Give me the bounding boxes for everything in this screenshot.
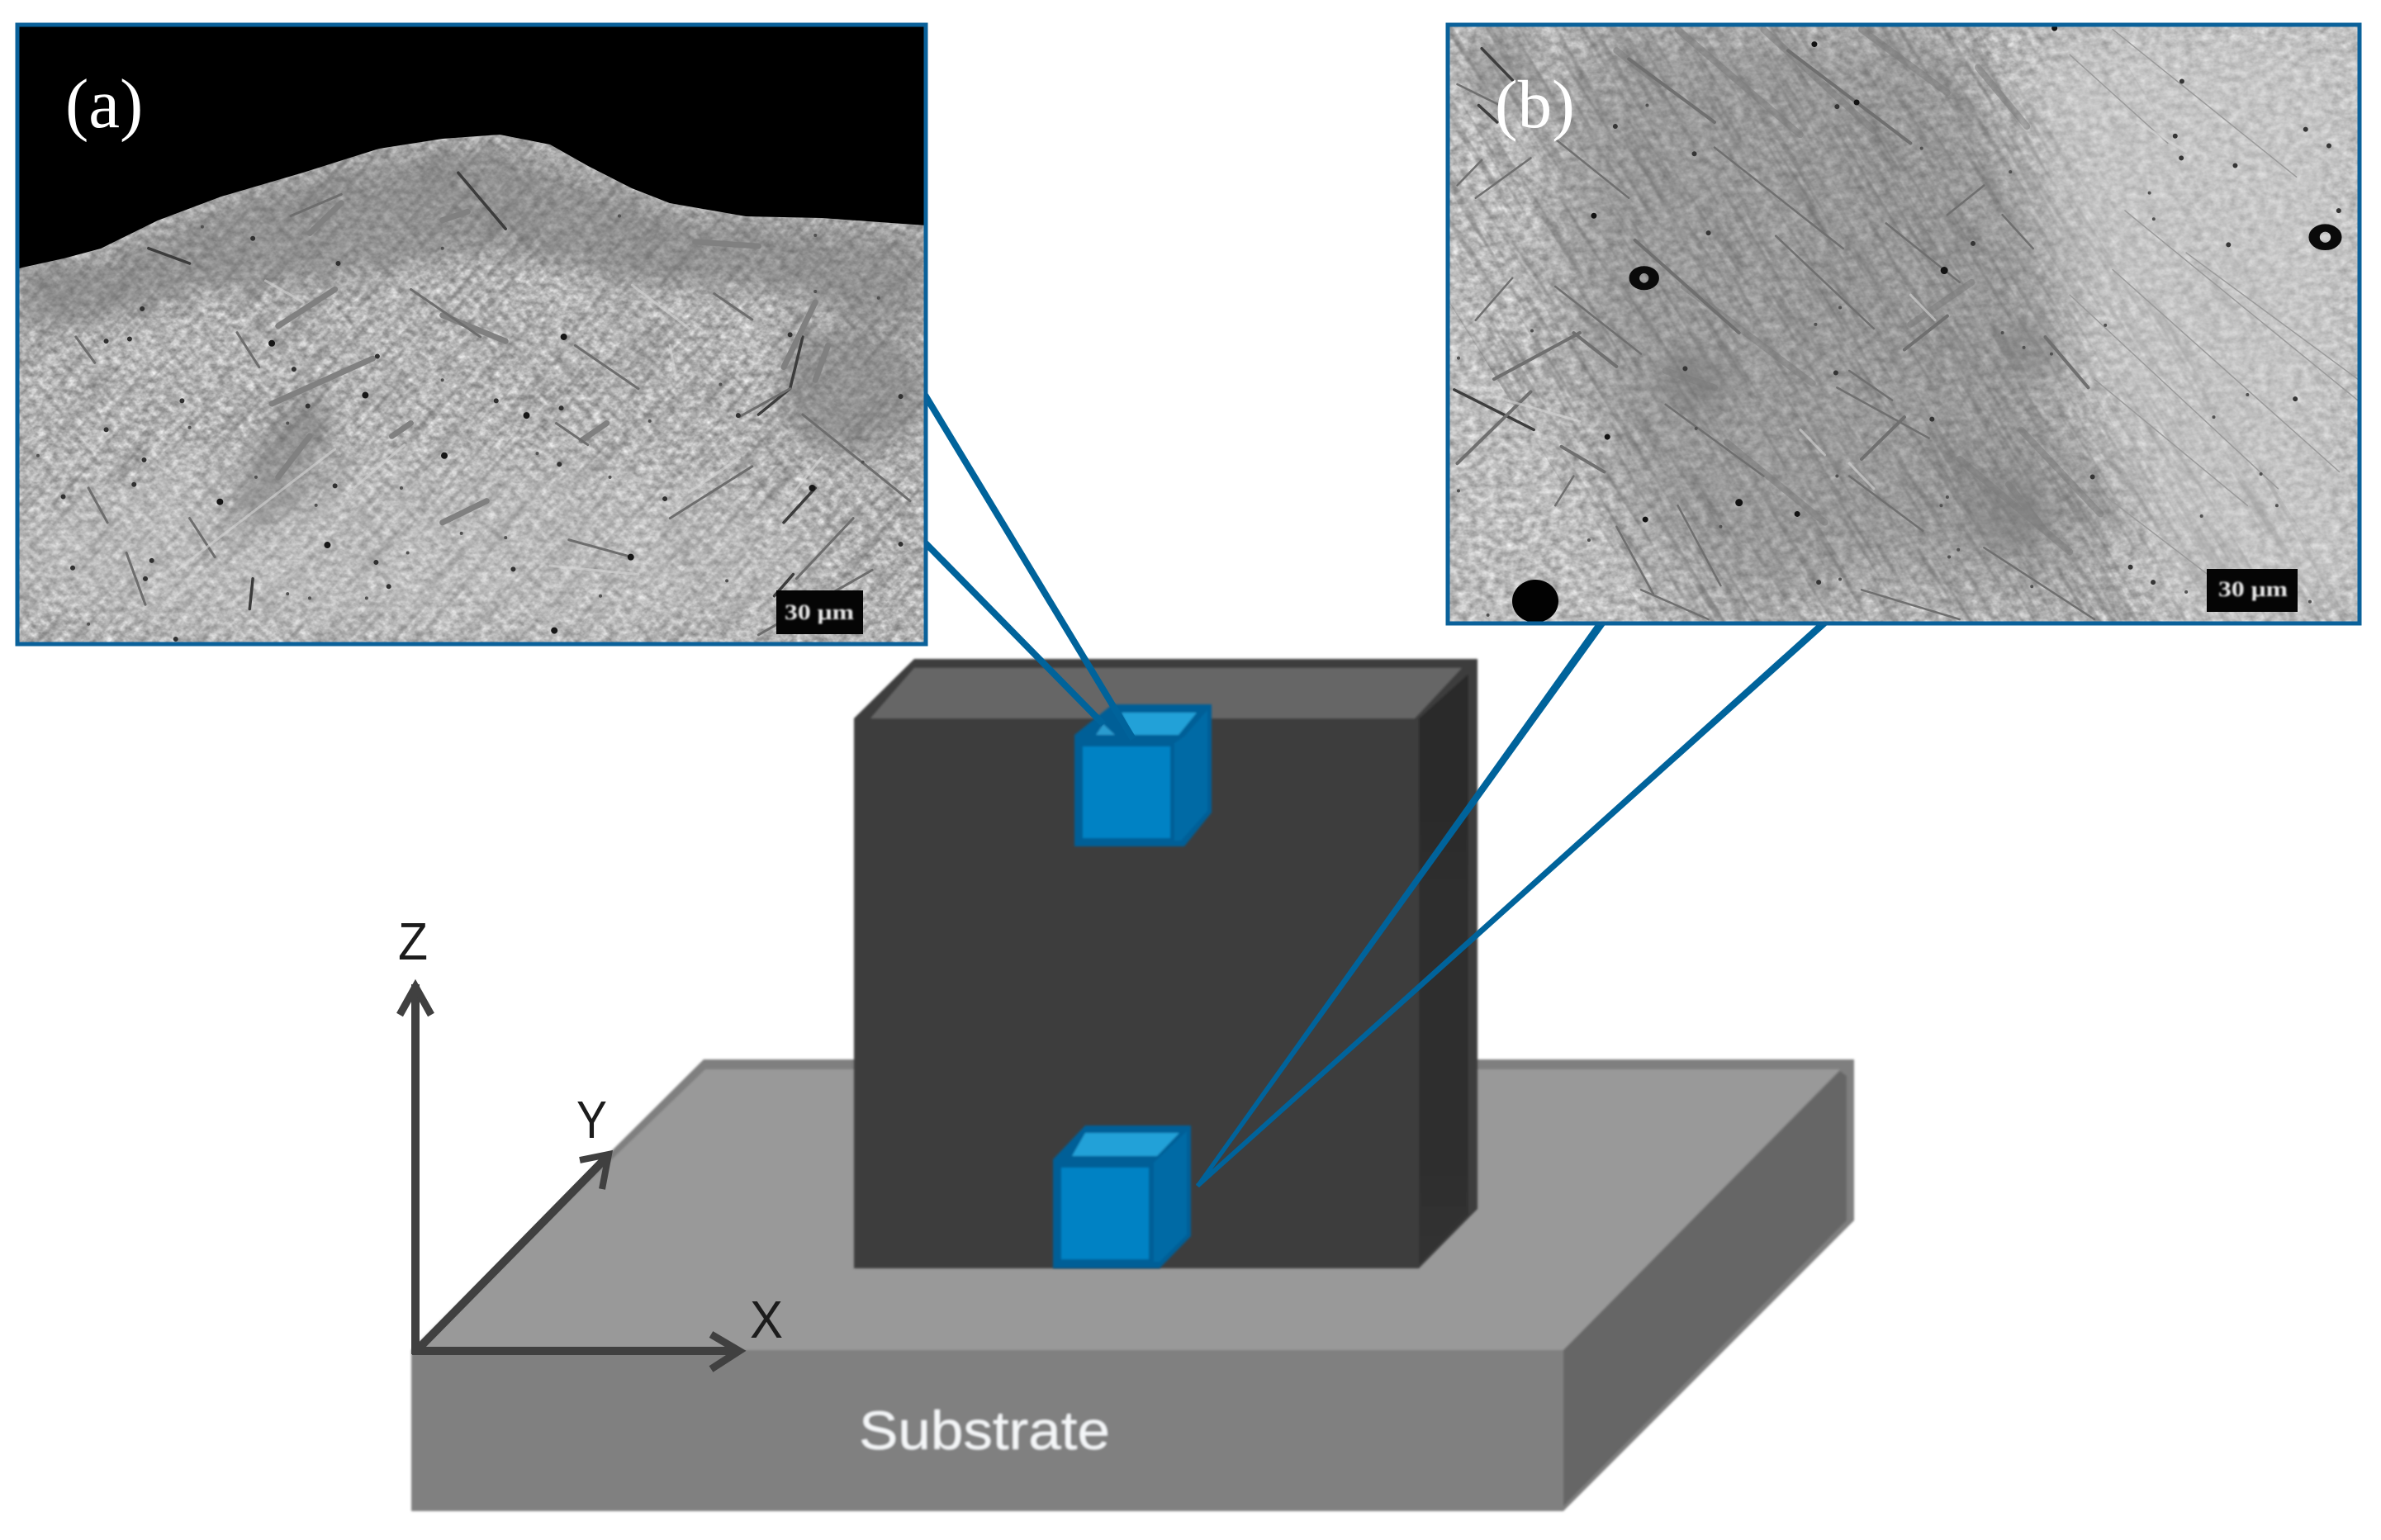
lamellar texture b [1450,26,2350,621]
cube: top sample location [1074,704,1212,846]
label: X: X [750,1290,783,1349]
light right field [2015,25,2360,623]
substrate plate [411,1059,1854,1511]
label (b): (b) [1495,66,1575,142]
label: Y: Y [576,1090,607,1149]
ring pores b [1634,228,2336,287]
lamellar texture a [20,135,923,642]
axis Y [415,1154,609,1352]
label (a): (a) [65,65,143,143]
leader lines to micrograph b [1196,621,1832,1187]
dark mounting background above surface [17,25,926,269]
panel a: micrograph of top region [15,23,928,646]
darker band under surface [17,145,929,539]
leader lines to micrograph a [921,388,1133,739]
streaks b [1454,30,2358,619]
streaks a [76,173,910,635]
light lower field [0,462,826,644]
large pore b [1512,580,1558,623]
axis X [412,1334,739,1369]
pores b [1458,28,2339,615]
scale bar b [2207,569,2298,612]
panel b: micrograph of bottom region [1445,23,2362,626]
label: Z: Z [398,912,428,971]
dark central field [1553,25,2114,623]
label: substrate: Substrate [859,1400,1110,1461]
cube: bottom sample location [1053,1125,1191,1268]
axis Z [400,984,431,1354]
scale bar b: 30 μm [2218,577,2288,601]
scale bar a [776,590,863,634]
scale bar a: 30 μm [785,600,854,624]
pores a [38,216,901,639]
deposited block [854,659,1477,1268]
